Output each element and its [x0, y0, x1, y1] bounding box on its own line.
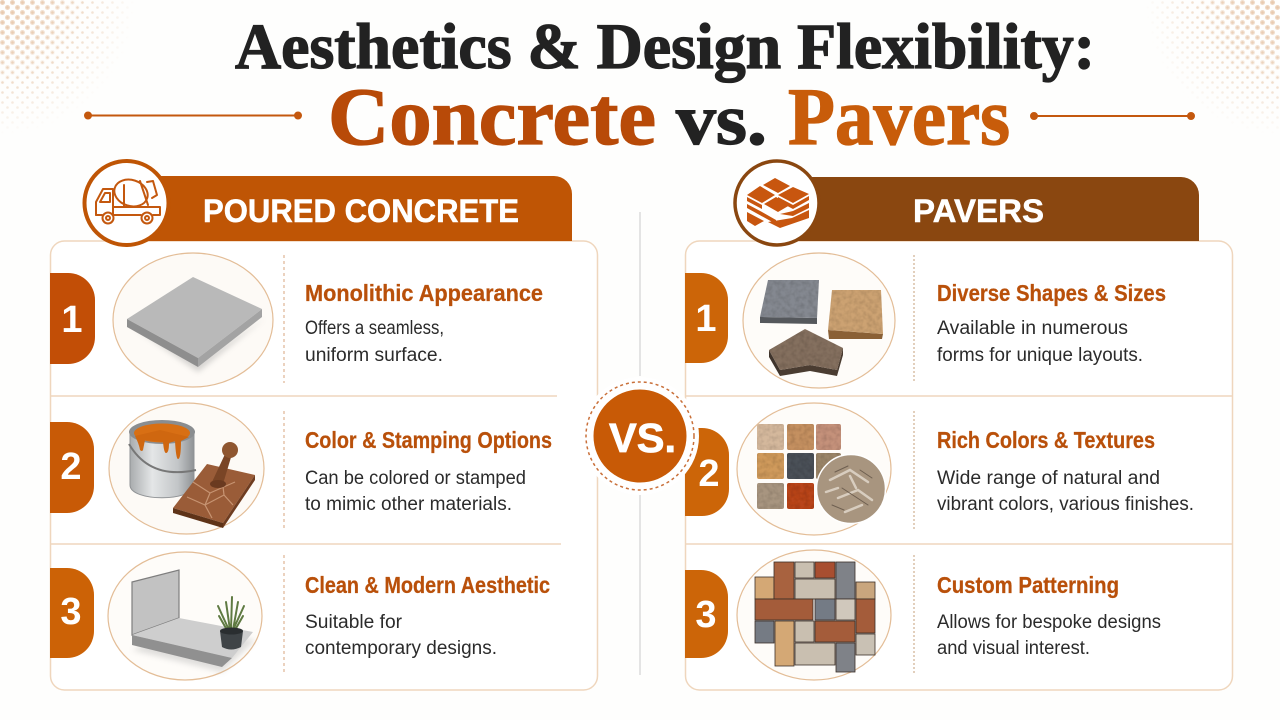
number badge 1: 1	[695, 298, 717, 340]
item text: to mimic other materials.	[305, 494, 512, 515]
divider	[913, 555, 915, 675]
item text	[937, 572, 1161, 659]
background halftone: top left	[0, 0, 124, 124]
item text: Available in numerous	[937, 318, 1128, 339]
header bar: pavers	[735, 161, 1199, 245]
icon: stacked pavers	[735, 161, 819, 245]
item 3: custom patterning	[685, 550, 1161, 680]
title rule left	[84, 112, 302, 119]
illustration: concrete corner with plant	[108, 552, 262, 680]
title line 2: Pavers: Pavers	[788, 71, 1010, 162]
item text: Offers a seamless,	[305, 318, 444, 339]
item text: vibrant colors, various finishes.	[937, 494, 1194, 515]
vs badge	[581, 377, 699, 495]
illustration: concrete slab	[113, 253, 273, 387]
header label: POURED CONCRETE	[203, 193, 519, 229]
item text: Allows for bespoke designs	[937, 612, 1161, 633]
centre divider	[639, 212, 641, 675]
number badge 2: 2	[698, 453, 720, 495]
item text	[305, 572, 550, 659]
item text	[937, 427, 1194, 515]
item text: Clean & Modern Aesthetic	[305, 572, 550, 598]
divider	[913, 255, 915, 383]
illustration: colour swatches	[737, 403, 891, 535]
number badge 3: 3	[60, 591, 82, 633]
vs label: VS.	[609, 415, 676, 461]
background halftone: top right	[1156, 0, 1280, 124]
panel: pavers	[685, 161, 1232, 690]
number badge 3	[50, 568, 94, 658]
title line 1: Aesthetics & Design Flexibility:	[235, 11, 1095, 83]
item text	[937, 280, 1166, 366]
item text: Rich Colors & Textures	[937, 427, 1155, 453]
item 2: rich colors	[685, 403, 1194, 535]
item text: uniform surface.	[305, 345, 443, 366]
item text: Wide range of natural and	[937, 468, 1160, 489]
item text: forms for unique layouts.	[937, 345, 1143, 366]
divider	[283, 411, 285, 530]
illustration: three paver shapes	[743, 253, 895, 388]
panel: poured concrete	[50, 161, 598, 690]
panel outline	[686, 241, 1232, 690]
row separators	[685, 396, 1232, 544]
item text: Custom Patterning	[937, 572, 1119, 598]
number badge 2: 2	[60, 446, 82, 488]
illustration: paint can and stamp	[109, 403, 264, 534]
number badge 1: 1	[61, 299, 83, 341]
icon: cement mixer truck	[84, 161, 168, 245]
header label: PAVERS	[913, 193, 1044, 229]
title line 2: vs.: vs.	[676, 80, 767, 160]
item text: Suitable for	[305, 612, 403, 633]
title line 2: Concrete: Concrete	[328, 71, 656, 162]
item text: contemporary designs.	[305, 638, 497, 659]
item 1: monolithic appearance	[50, 253, 543, 387]
divider	[283, 255, 285, 383]
item text: Monolithic Appearance	[305, 280, 543, 306]
number badge 3: 3	[695, 594, 717, 636]
item 3: clean and modern	[50, 552, 550, 680]
item text	[305, 427, 552, 515]
number badge 1	[685, 273, 728, 363]
divider	[913, 411, 915, 530]
item text: and visual interest.	[937, 638, 1090, 659]
divider	[283, 555, 285, 675]
item 2: color and stamping	[50, 403, 552, 534]
title rule right	[1030, 112, 1194, 120]
row separators	[50, 396, 561, 544]
item text: Color & Stamping Options	[305, 427, 552, 453]
item 1: diverse shapes	[685, 253, 1166, 388]
number badge 1	[50, 273, 95, 364]
title	[235, 11, 1095, 162]
number badge 2	[685, 428, 729, 516]
number badge 2	[50, 422, 94, 513]
number badge 3	[685, 570, 728, 658]
illustration: paver pattern	[737, 550, 891, 680]
panel outline	[50, 241, 598, 690]
item text: Diverse Shapes & Sizes	[937, 280, 1166, 306]
item text: Can be colored or stamped	[305, 468, 526, 489]
item text	[305, 280, 543, 366]
header bar: poured concrete	[84, 161, 572, 245]
